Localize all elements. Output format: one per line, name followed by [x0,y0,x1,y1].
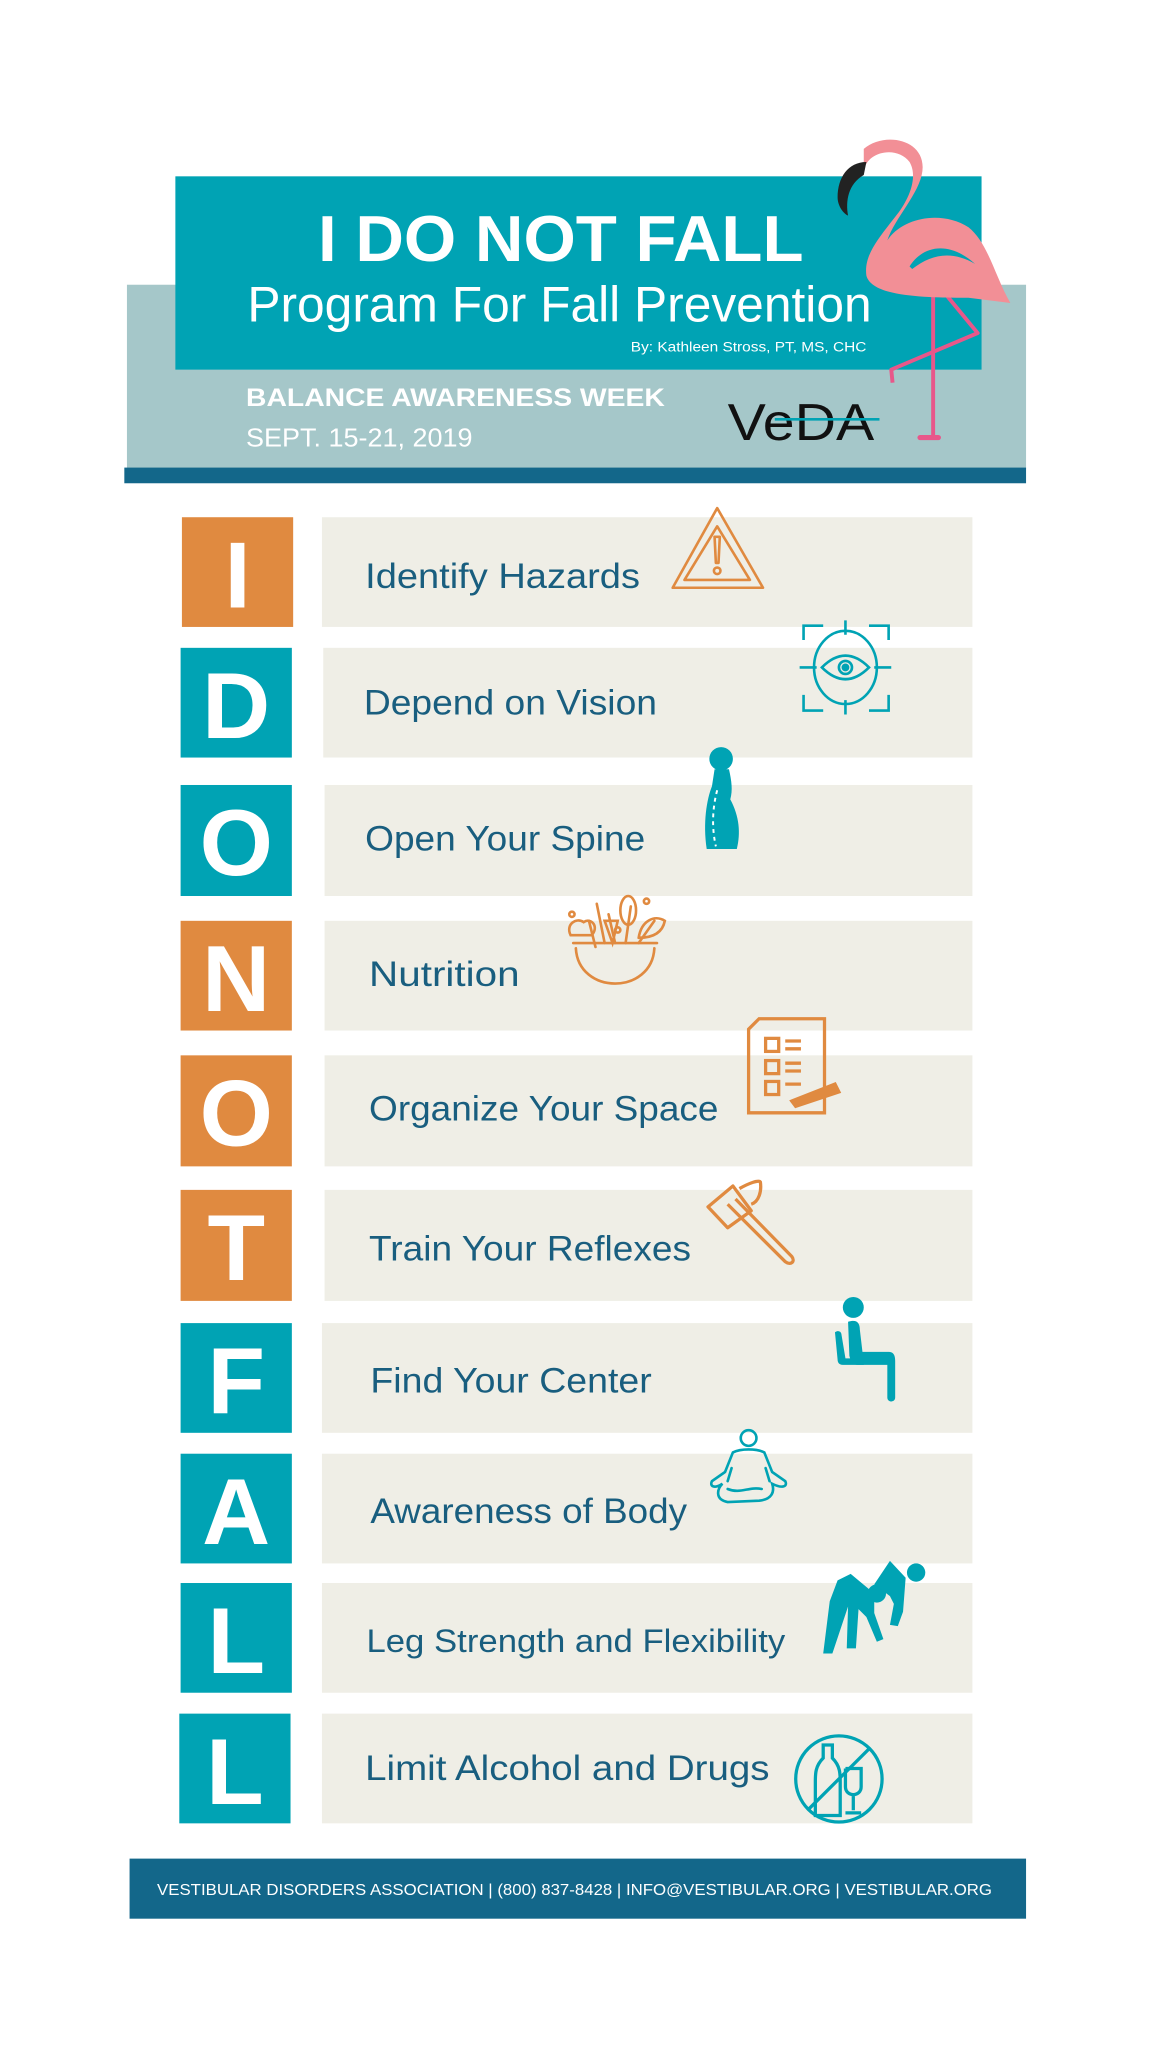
event dates: SEPT. 15-21, 2019 [246,423,472,453]
icon: hammer [708,1181,793,1263]
row: O [181,785,972,896]
title: I DO NOT FALL [318,202,804,275]
row: I [182,517,972,627]
row: O: Open Your Spine [365,819,645,858]
row: O: O [200,790,273,895]
row: F [181,1323,972,1433]
row: L: Limit Alcohol and Drugs [365,1749,770,1788]
row: O: Organize Your Space [369,1090,718,1129]
icon: warning triangle [673,508,763,588]
subtitle: Program For Fall Prevention [247,276,872,332]
row: N: Nutrition [369,955,520,994]
header panel [124,176,1026,483]
icon: exercise [823,1561,925,1654]
footer: VESTIBULAR DISORDERS ASSOCIATION | (800) 837-8428 | INFO@VESTIBULAR.ORG | VESTIBULAR.ORG [157,1882,992,1899]
row: N: N [202,926,270,1031]
row: L [179,1714,972,1824]
event name: BALANCE AWARENESS WEEK [246,385,665,412]
footer [130,1859,1026,1919]
row: I: Identify Hazards [365,557,640,596]
row: A [181,1454,972,1564]
logo: VEDA: VeDA [728,394,874,452]
row: L: L [206,1719,264,1824]
row: F: Find Your Center [370,1361,652,1400]
row: L: Leg Strength and Flexibility [366,1622,786,1659]
rows [179,517,972,1824]
row: T [181,1190,972,1301]
row: T: T [207,1195,265,1300]
row: D [181,648,972,758]
row: I: I [224,522,251,627]
icon: seated person [835,1297,895,1401]
icon: eye target [800,620,891,714]
row: L: L [207,1588,265,1693]
icon: no alcohol [796,1736,882,1822]
icon: flamingo [838,140,1010,438]
icon: spine [705,747,739,849]
row: D: Depend on Vision [364,683,657,722]
row: N [181,921,972,1031]
row: O [181,1055,972,1166]
row: T: Train Your Reflexes [369,1229,691,1268]
row: A: A [202,1459,270,1564]
row: D: D [202,653,270,758]
author: By: Kathleen Stross, PT, MS, CHC [631,339,866,354]
row: F: F [207,1328,265,1433]
row: A: Awareness of Body [370,1492,687,1531]
icon: salad bowl [569,896,665,984]
icon: checklist [749,1019,839,1113]
row: O: O [200,1061,273,1165]
icon: meditation [711,1430,786,1502]
row: L [181,1583,972,1693]
